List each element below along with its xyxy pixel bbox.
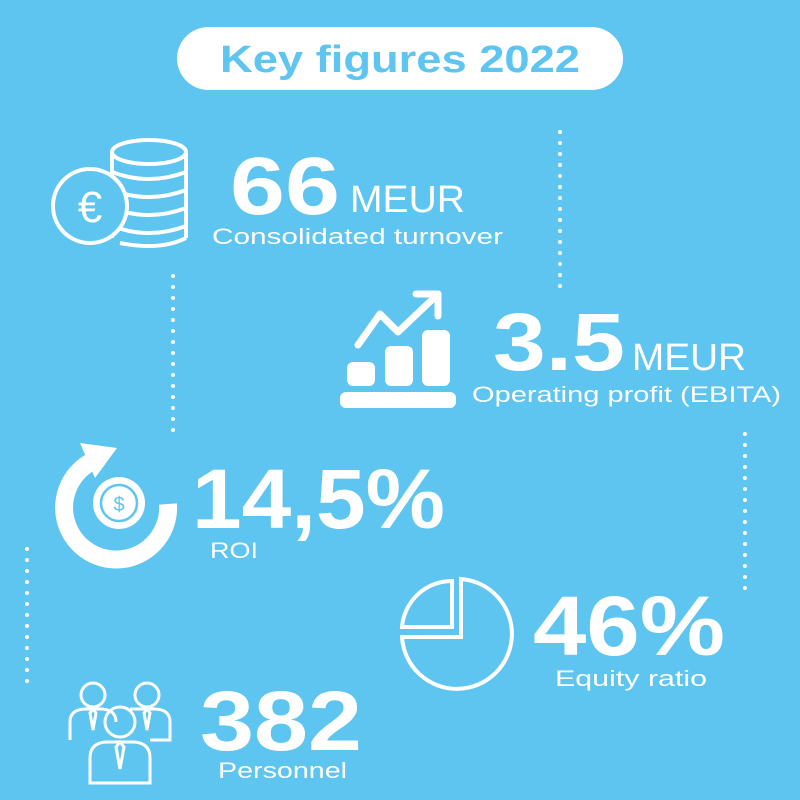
icon: pie chart (402, 579, 512, 689)
icon: coins: € (78, 183, 102, 232)
stat: operating profit: Operating profit (EBITA) (472, 382, 781, 407)
stat: operating profit (472, 297, 781, 407)
stat: personnel: Personnel (218, 758, 347, 783)
stat: ROI: 14,5% (192, 452, 445, 546)
stat: turnover: 66 (230, 141, 340, 232)
stat: personnel: 382 (200, 674, 362, 768)
title: Key figures 2022 (220, 39, 580, 81)
stat: turnover (212, 141, 503, 249)
stat: operating profit: MEUR (632, 337, 746, 379)
icon: growth chart (340, 294, 456, 408)
stat: operating profit: 3.5 (493, 297, 625, 388)
icon: ROI cycle (64, 443, 168, 560)
stat: equity ratio: 46% (533, 579, 725, 673)
stat: turnover: Consolidated turnover (212, 224, 503, 249)
stat: turnover: MEUR (350, 179, 465, 221)
stat: ROI: ROI (210, 538, 258, 563)
title (177, 27, 623, 90)
icon: people (70, 683, 170, 783)
icon: ROI cycle: $ (113, 494, 125, 516)
stat: equity ratio: Equity ratio (555, 666, 707, 691)
icon: coins (53, 140, 186, 246)
